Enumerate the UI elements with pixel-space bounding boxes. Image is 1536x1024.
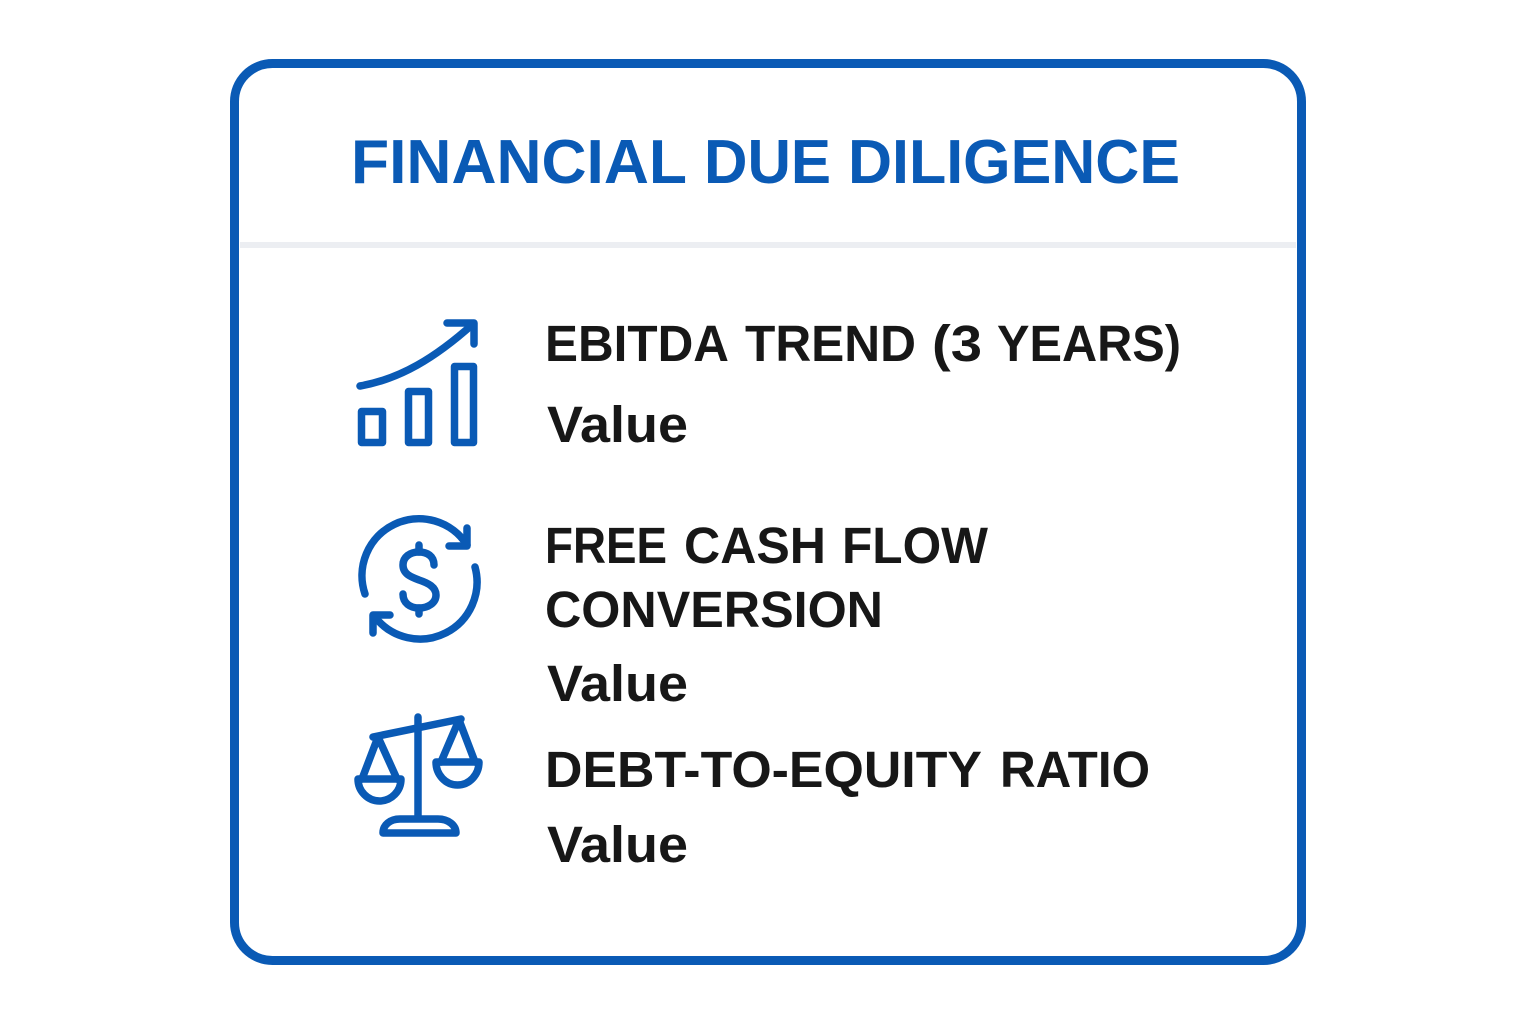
item: debt-to-equity ratio <box>358 717 1150 873</box>
title: DUE <box>704 128 831 197</box>
value: free cash flow conversion: Value <box>547 655 688 712</box>
label: free cash flow conversion: CONVERSION <box>545 581 883 638</box>
label: EBITDA trend: EBITDA <box>545 315 729 372</box>
item: EBITDA trend <box>360 315 1181 453</box>
label: EBITDA trend: TREND <box>745 315 916 372</box>
icon: circular arrows with dollar sign <box>362 519 477 639</box>
value: debt-to-equity ratio: Value <box>547 816 688 873</box>
title: FINANCIAL <box>351 128 687 197</box>
icon: rising bar chart with arrow <box>360 323 474 442</box>
label: free cash flow conversion: FREE <box>545 517 667 574</box>
label: EBITDA trend <box>545 315 1181 372</box>
icon: balance scale <box>358 717 479 833</box>
label: debt-to-equity ratio: RATIO <box>1000 741 1150 798</box>
value: EBITDA trend: Value <box>547 396 688 453</box>
panel: card <box>234 64 1302 960</box>
label: EBITDA trend: YEARS) <box>997 315 1181 372</box>
label: free cash flow conversion: FLOW <box>842 517 989 574</box>
title: DILIGENCE <box>848 128 1180 197</box>
title <box>351 128 1180 197</box>
label: debt-to-equity ratio: DEBT-TO-EQUITY <box>545 741 982 798</box>
label: free cash flow conversion <box>545 517 989 638</box>
label: EBITDA trend: (3 <box>932 315 982 372</box>
item: free cash flow conversion <box>362 517 989 712</box>
label: free cash flow conversion: CASH <box>684 517 826 574</box>
